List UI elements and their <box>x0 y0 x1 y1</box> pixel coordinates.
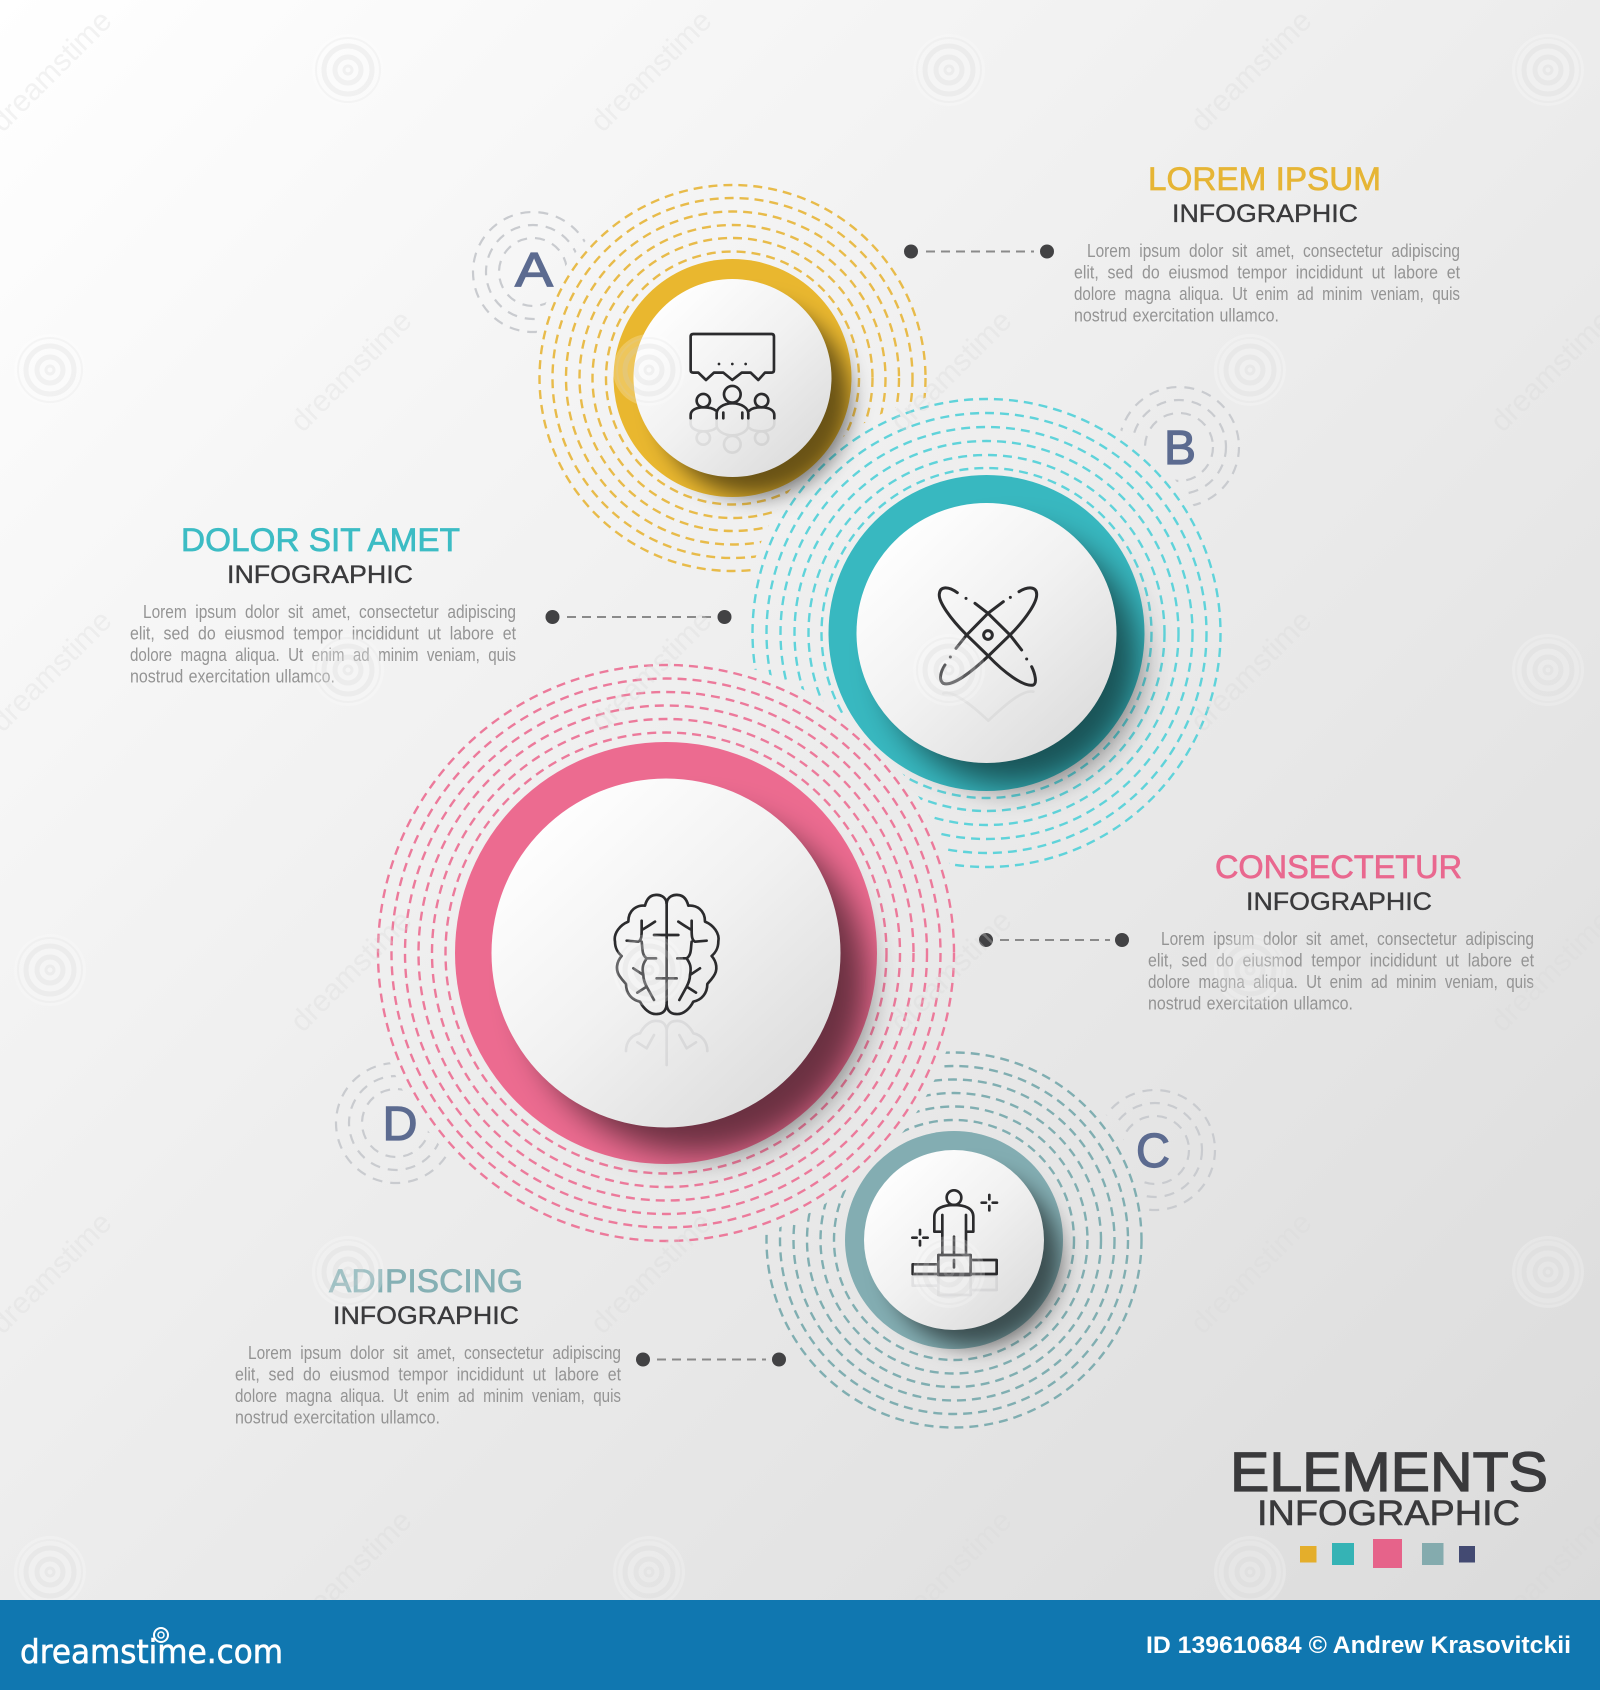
text block: Adipiscing <box>235 1263 621 1428</box>
watermark overlay: dreamstime <box>584 1206 718 1340</box>
icon reflection: audience <box>691 420 774 453</box>
text block: Adipiscing: dolore magna aliqua. Ut enim ad minim veniam, quis <box>235 1386 621 1406</box>
text block: Dolor Sit Amet: Lorem ipsum dolor sit amet, consectetur adipiscing <box>143 602 516 622</box>
footer bar <box>0 1600 1600 1690</box>
icon reflection: brain <box>626 1021 707 1065</box>
connector: C <box>636 1352 786 1366</box>
text block: Lorem Ipsum: LOREM IPSUM <box>1148 161 1381 197</box>
text block: Lorem Ipsum: INFOGRAPHIC <box>1172 200 1358 228</box>
text block: Dolor Sit Amet <box>130 522 516 686</box>
text block: Adipiscing: Lorem ipsum dolor sit amet, consectetur adipiscing <box>248 1343 621 1363</box>
legend: Elements Infographic: INFOGRAPHIC <box>1257 1494 1520 1533</box>
icon: atom <box>939 588 1037 685</box>
text block: Consectetur: CONSECTETUR <box>1215 849 1462 885</box>
text block: Consectetur: nostrud exercitation ullamco. <box>1148 994 1353 1014</box>
connector: B <box>546 610 732 624</box>
text block: Lorem Ipsum: nostrud exercitation ullamco. <box>1074 306 1279 326</box>
dashed rings: circle C <box>766 1052 1142 1428</box>
icon reflection: atom <box>943 691 1033 721</box>
circle D: pink ring with white disk <box>455 742 877 1164</box>
circle B: teal ring with white disk <box>828 475 1144 791</box>
text block: Dolor Sit Amet: nostrud exercitation ullamco. <box>130 666 335 686</box>
text block: Dolor Sit Amet: DOLOR SIT AMET <box>181 522 460 558</box>
text block: Adipiscing: nostrud exercitation ullamco. <box>235 1408 440 1428</box>
text block: Adipiscing: elit, sed do eiusmod tempor incididunt ut labore et <box>235 1364 621 1384</box>
watermark overlay: dreamstime <box>284 904 418 1038</box>
watermark overlay: dreamstime <box>884 904 1018 1038</box>
watermark overlay: dreamstime <box>1184 4 1318 138</box>
text block: Consectetur: dolore magna aliqua. Ut enim ad minim veniam, quis <box>1148 972 1534 992</box>
icon reflection: person <box>913 1275 997 1295</box>
badge D: D <box>382 1098 418 1151</box>
watermark overlay: dreamstime <box>284 304 418 438</box>
badge B <box>1119 387 1239 507</box>
circle C: grey-teal ring with white disk <box>845 1131 1063 1349</box>
dashed rings: circle B <box>752 399 1220 867</box>
text block: Consectetur: Lorem ipsum dolor sit amet, consectetur adipiscing <box>1161 929 1534 949</box>
badge C: C <box>1136 1125 1170 1178</box>
badge D <box>336 1063 456 1183</box>
text block: Consectetur: elit, sed do eiusmod tempor incididunt ut labore et <box>1148 950 1534 970</box>
badge A: A <box>515 244 553 297</box>
icon: audience with speech bubble <box>691 334 774 418</box>
text block: Adipiscing: INFOGRAPHIC <box>333 1302 519 1330</box>
watermark overlay: dreamstime <box>284 1504 418 1638</box>
badge C <box>1095 1090 1215 1210</box>
text block: Lorem Ipsum <box>1074 161 1460 326</box>
text block: Lorem Ipsum: Lorem ipsum dolor sit amet, consectetur adipiscing <box>1087 241 1460 261</box>
text block: Dolor Sit Amet: elit, sed do eiusmod tempor incididunt ut labore et <box>130 624 516 644</box>
watermark overlay: dreamstime <box>584 604 718 738</box>
circle A: yellow ring with white disk <box>614 259 852 497</box>
watermark overlay: dreamstime <box>884 1504 1018 1638</box>
badge B: B <box>1164 422 1196 475</box>
watermark overlay: dreamstime <box>1184 604 1318 738</box>
text block: Lorem Ipsum: dolore magna aliqua. Ut enim ad minim veniam, quis <box>1074 284 1460 304</box>
text block: Consectetur <box>1148 849 1534 1014</box>
text block: Dolor Sit Amet: INFOGRAPHIC <box>227 561 413 589</box>
text block: Adipiscing: ADIPISCING <box>329 1263 523 1299</box>
dashed rings: circle D <box>378 665 954 1241</box>
connector: A <box>904 244 1054 258</box>
icon: brain <box>615 895 719 1014</box>
legend: Elements Infographic: ELEMENTS <box>1230 1440 1548 1503</box>
watermark overlay: dreamstime <box>584 4 718 138</box>
footer credit: ID 139610684 © Andrew Krasovitckii <box>1146 1632 1571 1659</box>
connector: D <box>979 933 1129 947</box>
badge A <box>473 212 593 332</box>
watermark overlay: dreamstime <box>1184 1206 1318 1340</box>
text block: Lorem Ipsum: elit, sed do eiusmod tempor incididunt ut labore et <box>1074 262 1460 282</box>
footer logo: dreamstime.com <box>20 1632 283 1671</box>
dashed rings: circle A <box>540 185 926 571</box>
watermark overlay: dreamstime <box>884 304 1018 438</box>
legend: Elements Infographic <box>1230 1440 1548 1568</box>
icon: person on pedestal <box>912 1190 997 1275</box>
text block: Dolor Sit Amet: dolore magna aliqua. Ut enim ad minim veniam, quis <box>130 645 516 665</box>
text block: Consectetur: INFOGRAPHIC <box>1246 888 1432 916</box>
